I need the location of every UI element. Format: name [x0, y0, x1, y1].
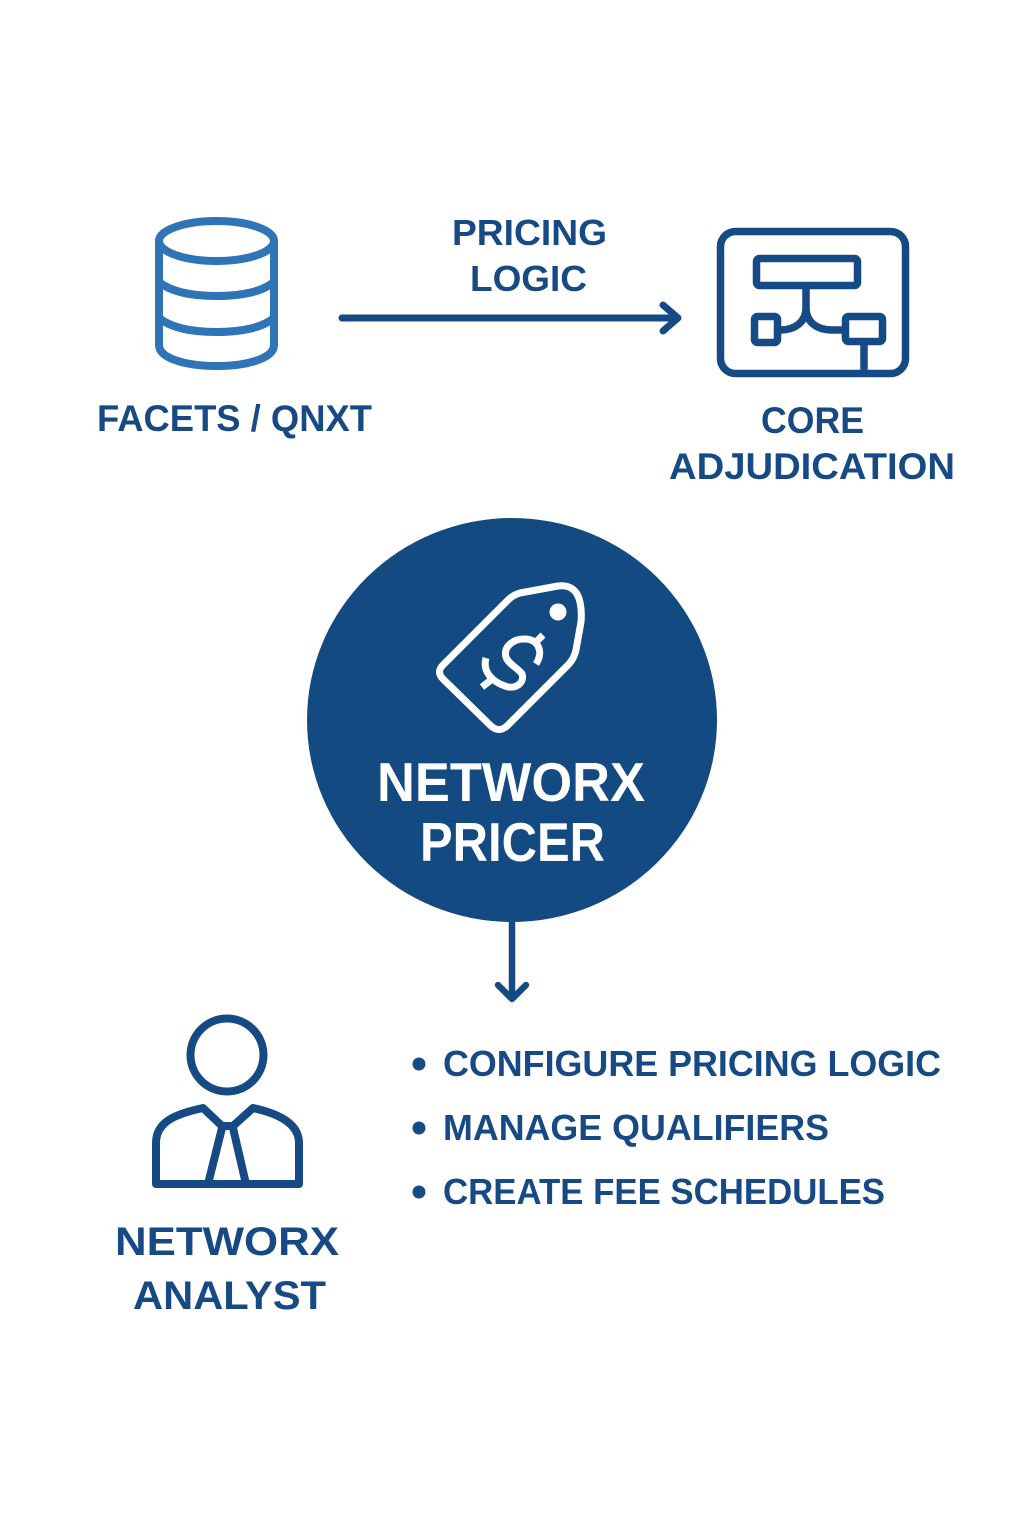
panel: Networx Pricer circle [307, 518, 717, 922]
list: analyst responsibilities [412, 1043, 941, 1212]
label: Pricing Logic: LOGIC [470, 258, 587, 299]
panel: pricing logic flow [342, 212, 678, 331]
label: Pricing Logic: PRICING [452, 212, 607, 253]
title: Networx Pricer: NETWORX [377, 751, 645, 813]
icon: price tag [440, 586, 581, 730]
label: Networx Analyst: ANALYST [133, 1274, 326, 1318]
list item: configure pricing logic: CONFIGURE PRICING LOGIC [443, 1043, 941, 1084]
arrow: to core adjudication [342, 305, 678, 331]
icon: workflow diagram [720, 232, 906, 374]
label: Networx Analyst: NETWORX [115, 1220, 339, 1264]
list item: create fee schedules: CREATE FEE SCHEDULES [443, 1171, 885, 1212]
icon: person with tie [156, 1018, 299, 1184]
label: Core Adjudication: CORE [761, 400, 864, 441]
label: Core Adjudication: ADJUDICATION [669, 446, 955, 487]
panel: Facets/QNXT source [97, 221, 372, 439]
circle background [307, 518, 717, 922]
panel: core adjudication [669, 232, 955, 487]
panel: Networx Analyst [115, 1018, 339, 1318]
arrow: down to analyst tasks [498, 922, 526, 999]
label: Facets/QNXT: FACETS / QNXT [97, 398, 372, 439]
list item: manage qualifiers: MANAGE QUALIFIERS [443, 1107, 829, 1148]
icon: database [159, 221, 274, 366]
title: Networx Pricer: PRICER [420, 811, 605, 873]
